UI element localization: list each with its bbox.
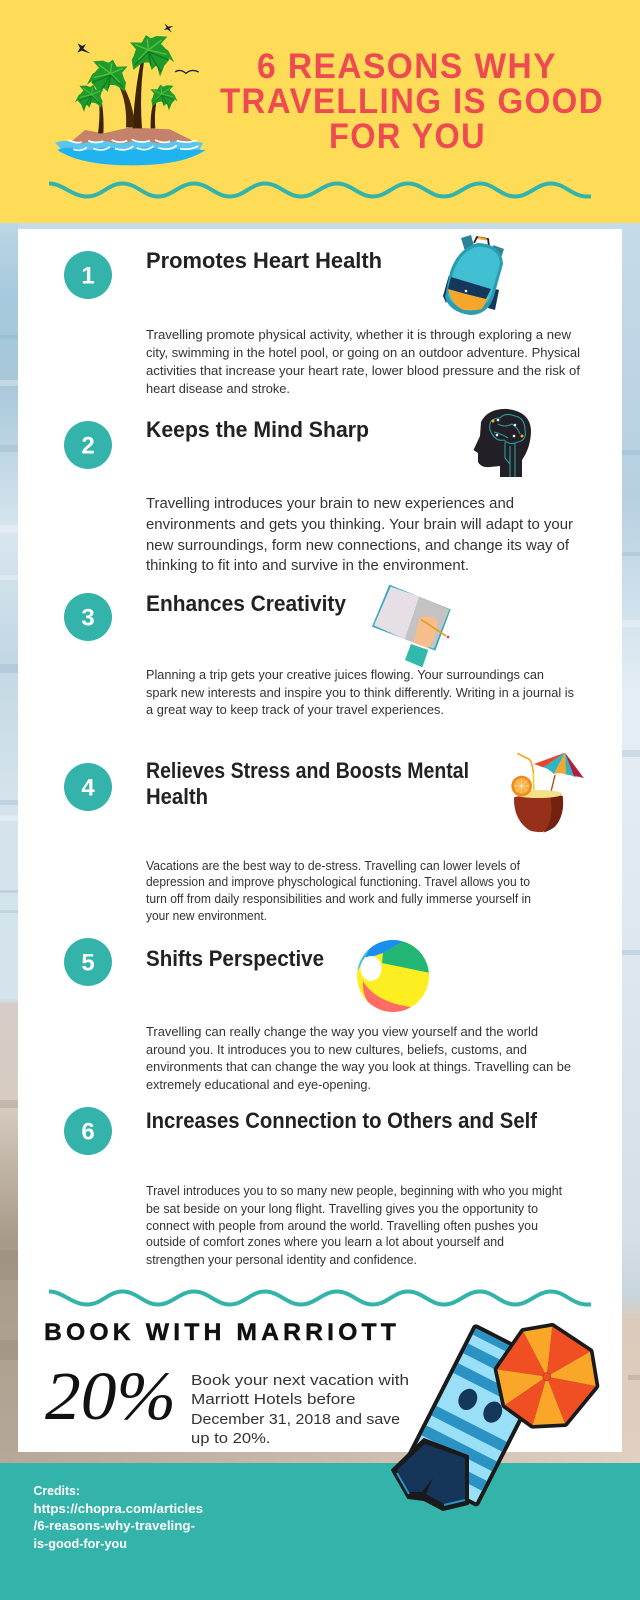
icon: beach ball — [357, 940, 429, 1012]
panel: white content card — [18, 229, 622, 1452]
body text 4: turn off from daily responsibilities and work and fully immerse yourself in — [146, 891, 531, 906]
number badge 6 — [64, 1107, 112, 1155]
body text 1 — [146, 327, 580, 396]
icon: backpack — [443, 235, 504, 315]
credits: Credits: — [34, 1483, 80, 1498]
panel: reason 5 — [64, 930, 571, 1092]
title: FOR YOU — [329, 117, 486, 156]
icon: journal, hand and pencil — [372, 585, 451, 667]
panel: reason 4 — [64, 753, 584, 923]
title — [220, 47, 604, 156]
body text 6 — [146, 1183, 562, 1267]
body text 2: new surroundings, form new connections, and change its way of — [146, 538, 570, 554]
offer heading: BOOK WITH MARRIOTT — [44, 1319, 400, 1346]
heading 5: Shifts Perspective — [146, 946, 324, 971]
panel: reason 6 — [64, 1107, 562, 1267]
heading 2: Keeps the Mind Sharp — [146, 417, 369, 442]
body text 1: heart disease and stroke. — [146, 381, 290, 396]
number badge 2: 2 — [81, 432, 95, 460]
shorts — [392, 1439, 468, 1510]
title: 6 REASONS WHY — [257, 47, 557, 86]
offer text — [191, 1372, 409, 1447]
number badge 1: 1 — [81, 262, 95, 290]
body text 2: environments and gets you thinking. Your brain will adapt to your — [146, 517, 573, 533]
footer band — [0, 1463, 640, 1600]
number badge 3: 3 — [81, 604, 95, 632]
towel — [400, 1323, 552, 1508]
body text 1: city, swimming in the hotel pool, or going on an outdoor adventure. Physical — [146, 345, 580, 360]
body text 3: spark new interests and inspire you to think differently. Writing in a journal is — [146, 685, 574, 700]
body text 5: extremely educational and eye-opening. — [146, 1077, 371, 1092]
body text 1: Travelling promote physical activity, whether it is through exploring a new — [146, 327, 572, 342]
body text 3: Planning a trip gets your creative juices flowing. Your surroundings can — [146, 667, 544, 682]
panel: reason 3 — [64, 585, 574, 717]
offer text: Marriott Hotels before — [191, 1391, 356, 1408]
icon: coconut drink with umbrella — [511, 753, 584, 833]
body text 6: strengthen your personal identity and confidence. — [146, 1252, 417, 1267]
body text 6: be sat beside on your long flight. Travelling gives you the opportunity to — [146, 1201, 538, 1216]
body text 6: connect with people from around the world. Travelling often pushes you — [146, 1218, 538, 1233]
body text 5: around you. It introduces you to new cultures, beliefs, customs, and — [146, 1042, 527, 1057]
icon: palm island with birds — [55, 23, 206, 165]
credits: is-good-for-you — [34, 1536, 127, 1551]
body text 6: Travel introduces you to so many new people, beginning with who you might — [146, 1183, 562, 1198]
offer text: Book your next vacation with — [191, 1372, 409, 1389]
heading 6: Increases Connection to Others and Self — [146, 1108, 537, 1133]
background: beach photo — [0, 222, 640, 1464]
heading 3: Enhances Creativity — [146, 591, 346, 616]
body text 4: depression and improve physchological functioning. Travel allows you to — [146, 874, 530, 889]
offer text: up to 20%. — [191, 1430, 270, 1447]
number badge 3 — [64, 593, 112, 641]
number badge 6: 6 — [81, 1118, 95, 1146]
number badge 4: 4 — [81, 774, 95, 802]
credits — [34, 1483, 203, 1551]
body text 5: Travelling can really change the way you view yourself and the world — [146, 1024, 538, 1039]
body text 2: Travelling introduces your brain to new experiences and — [146, 496, 514, 512]
number badge 5 — [64, 938, 112, 986]
icon: beach towel, shorts and umbrella — [392, 1323, 596, 1510]
header band — [0, 0, 640, 223]
body text 2: thinking to fit into and survive in the environment. — [146, 558, 469, 574]
credits: /6-reasons-why-traveling- — [34, 1518, 195, 1533]
body text 4: Vacations are the best way to de-stress. Travelling can lower levels of — [146, 858, 520, 873]
number badge 5: 5 — [81, 950, 95, 976]
credits: https://chopra.com/articles — [34, 1501, 203, 1516]
panel: reason 1 — [64, 235, 580, 396]
body text 3: a great way to keep track of your travel experiences. — [146, 702, 444, 717]
heading 4: Health — [146, 784, 208, 809]
heading 4 — [146, 758, 469, 809]
number badge 4 — [64, 763, 112, 811]
body text 2 — [146, 496, 573, 574]
icon: head with brain circuits — [474, 409, 531, 477]
heading 1: Promotes Heart Health — [146, 248, 382, 273]
body text 6: outside of comfort zones where you learn a lot about yourself and — [146, 1234, 504, 1249]
heading 4: Relieves Stress and Boosts Mental — [146, 758, 469, 783]
panel: reason 2 — [64, 409, 573, 574]
number badge 1 — [64, 251, 112, 299]
offer text: December 31, 2018 and save — [191, 1411, 400, 1428]
panel: Marriott offer — [44, 1319, 596, 1510]
body text 1: activities that increase your heart rate, lower blood pressure and the risk of — [146, 363, 580, 378]
body text 4: your new environment. — [146, 908, 267, 923]
umbrella — [497, 1327, 596, 1425]
body text 5 — [146, 1024, 571, 1092]
body text 3 — [146, 667, 574, 717]
number badge 2 — [64, 421, 112, 469]
body text 5: environments that can change the way you look at things. Travelling can be — [146, 1059, 571, 1074]
title: TRAVELLING IS GOOD — [220, 82, 604, 121]
discount figure: 20% — [45, 1358, 176, 1434]
body text 4 — [146, 858, 531, 923]
